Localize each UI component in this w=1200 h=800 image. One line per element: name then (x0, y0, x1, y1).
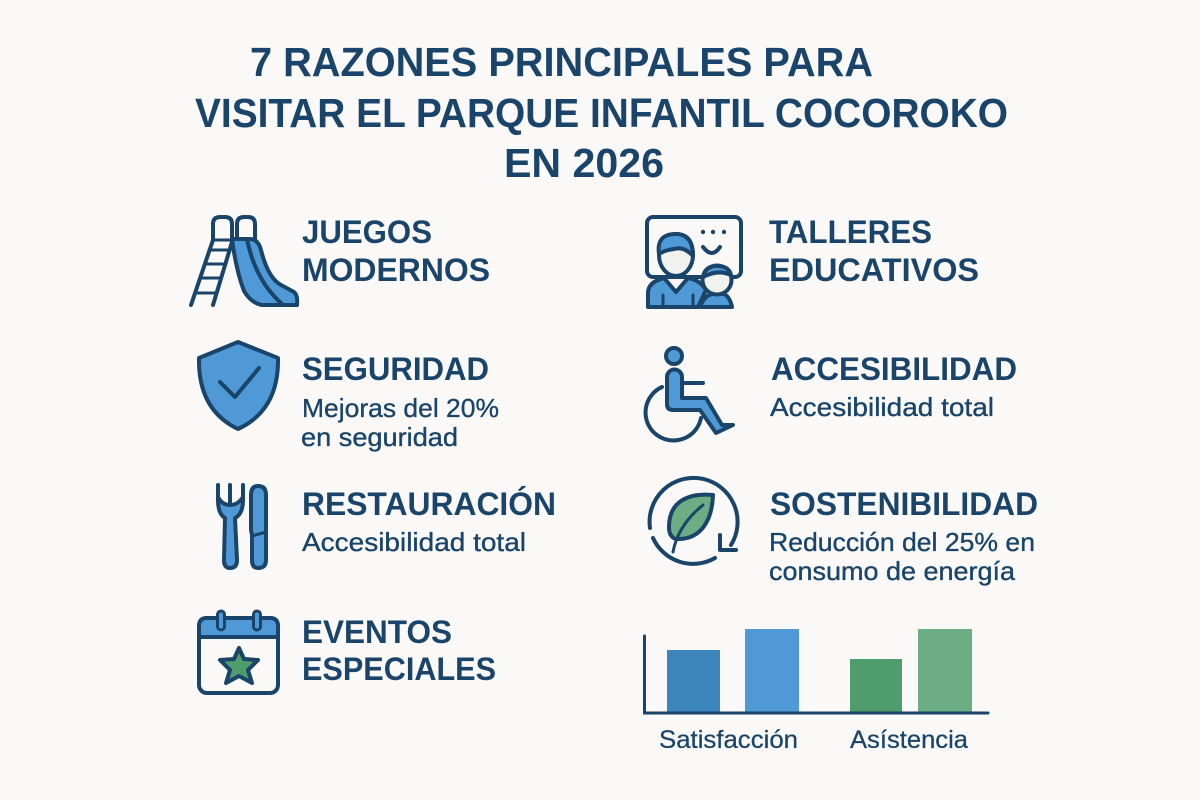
title: 7 RAZONES PRINCIPALES PARA (250, 39, 873, 85)
icon: shield (199, 342, 278, 429)
heading: juegos modernos (302, 214, 490, 288)
text: restauracion: Accesibilidad total (302, 527, 526, 557)
heading: accesibilidad: ACCESIBILIDAD (771, 351, 1017, 387)
text: sostenibilidad: Reducción del 25% en (769, 527, 1035, 557)
text: seguridad: Mejoras del 20% (302, 393, 499, 423)
panel: seguridad (199, 342, 499, 452)
icon: calendar with star (199, 611, 278, 693)
panel: restauracion (218, 485, 556, 568)
heading: restauracion: RESTAURACIÓN (302, 486, 556, 522)
text: sostenibilidad (769, 527, 1035, 586)
icon: leaf with cycle arrows (650, 478, 738, 564)
title: EN 2026 (504, 140, 664, 186)
panel: sostenibilidad (650, 478, 1038, 586)
text: sostenibilidad: consumo de energía (769, 556, 1016, 586)
icon: fork and knife (218, 485, 266, 568)
heading: talleres educativos (769, 214, 979, 288)
heading: talleres educativos: TALLERES (769, 214, 932, 250)
heading: eventos especiales: ESPECIALES (302, 651, 496, 687)
heading: seguridad: SEGURIDAD (302, 351, 489, 387)
bar chart: Satisfacción (659, 726, 798, 754)
icon: slide (191, 217, 297, 305)
bar chart: Asístencia (850, 726, 968, 754)
panel: juegos modernos (191, 214, 490, 305)
heading: sostenibilidad: SOSTENIBILIDAD (770, 486, 1038, 522)
icon: teacher and child (647, 217, 741, 307)
heading: juegos modernos: JUEGOS (302, 214, 432, 250)
bar chart (644, 629, 988, 754)
title (195, 39, 1008, 186)
icon: wheelchair (646, 348, 733, 441)
heading: eventos especiales (302, 614, 496, 687)
heading: juegos modernos: MODERNOS (302, 252, 490, 288)
title: VISITAR EL PARQUE INFANTIL COCOROKO (195, 90, 1008, 136)
heading: talleres educativos: EDUCATIVOS (769, 252, 979, 288)
text: accesibilidad: Accesibilidad total (770, 392, 994, 422)
panel: accesibilidad (646, 348, 1017, 441)
panel: talleres educativos (647, 214, 979, 307)
panel: eventos especiales (199, 611, 496, 693)
heading: eventos especiales: EVENTOS (302, 614, 452, 650)
text: seguridad: en seguridad (301, 422, 458, 452)
text: seguridad (301, 393, 499, 452)
